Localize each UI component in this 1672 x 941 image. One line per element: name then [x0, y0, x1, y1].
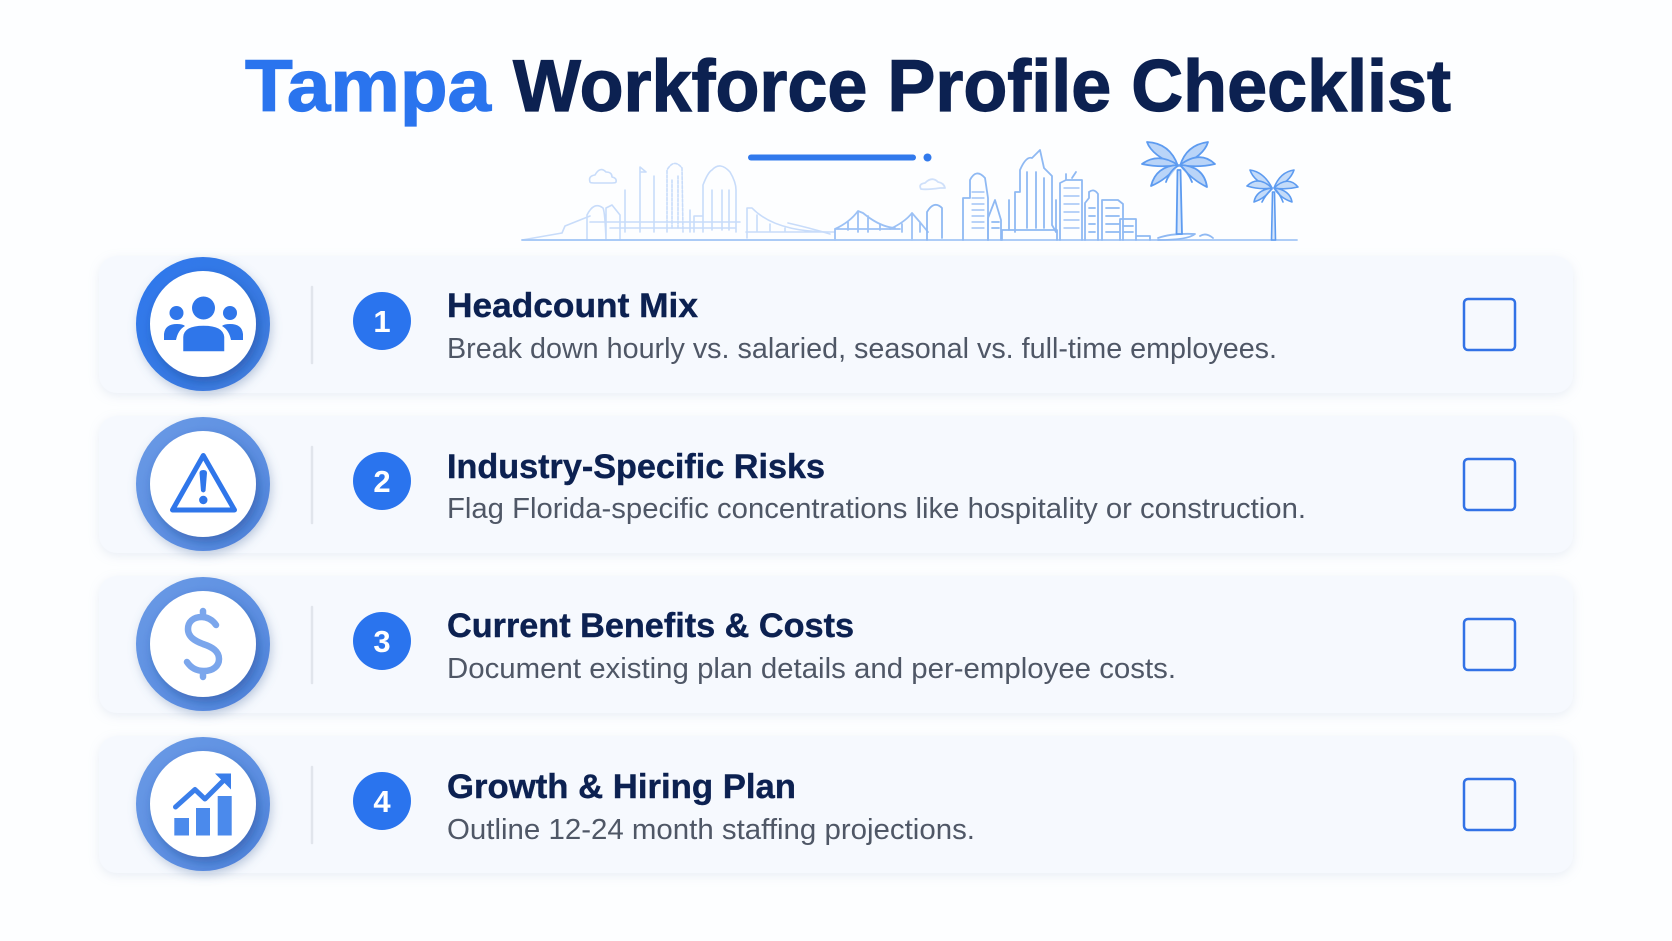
panel: headcount mix	[99, 256, 1573, 393]
icon: dollar sign in ring	[136, 577, 270, 711]
number badge 3: 3	[373, 624, 391, 659]
number badge 4: 4	[373, 784, 391, 819]
number badge 1	[353, 292, 411, 350]
description: Break down hourly vs. salaried, seasonal vs. full-time employees.	[447, 333, 1277, 365]
skyline illustration	[522, 142, 1298, 240]
card background	[99, 576, 1573, 713]
heading: Industry-Specific Risks	[447, 448, 825, 486]
description: Document existing plan details and per-employee costs.	[447, 653, 1176, 685]
icon: people in ring	[136, 257, 270, 391]
card background	[99, 256, 1573, 393]
card background	[99, 736, 1573, 873]
checkbox	[1464, 459, 1515, 510]
checkbox	[1464, 619, 1515, 670]
title: Tampa	[245, 46, 492, 127]
card background	[99, 416, 1573, 553]
number badge 1: 1	[373, 304, 391, 339]
panel: industry-specific risks	[99, 416, 1573, 553]
checkbox	[1464, 779, 1515, 830]
number badge 2	[353, 452, 411, 510]
number badge 4	[353, 772, 411, 830]
panel: current benefits and costs	[99, 576, 1573, 713]
icon: growth chart in ring	[136, 737, 270, 871]
description: Flag Florida-specific concentrations like hospitality or construction.	[447, 493, 1306, 525]
number badge 3	[353, 612, 411, 670]
heading: Headcount Mix	[447, 287, 698, 325]
bridge	[835, 211, 928, 240]
title accent line	[748, 154, 932, 162]
heading: Growth & Hiring Plan	[447, 768, 796, 806]
heading: Current Benefits & Costs	[447, 607, 854, 645]
description: Outline 12-24 month staffing projections.	[447, 814, 975, 846]
small palm tree	[1247, 170, 1298, 240]
panel: growth and hiring plan	[99, 736, 1573, 873]
left skyline	[522, 163, 900, 240]
number badge 2: 2	[373, 464, 391, 499]
right skyline	[522, 150, 1297, 240]
large palm tree	[1142, 142, 1215, 234]
title: Workforce Profile Checklist	[513, 46, 1451, 127]
checkbox	[1464, 299, 1515, 350]
icon: warning triangle in ring	[136, 417, 270, 551]
